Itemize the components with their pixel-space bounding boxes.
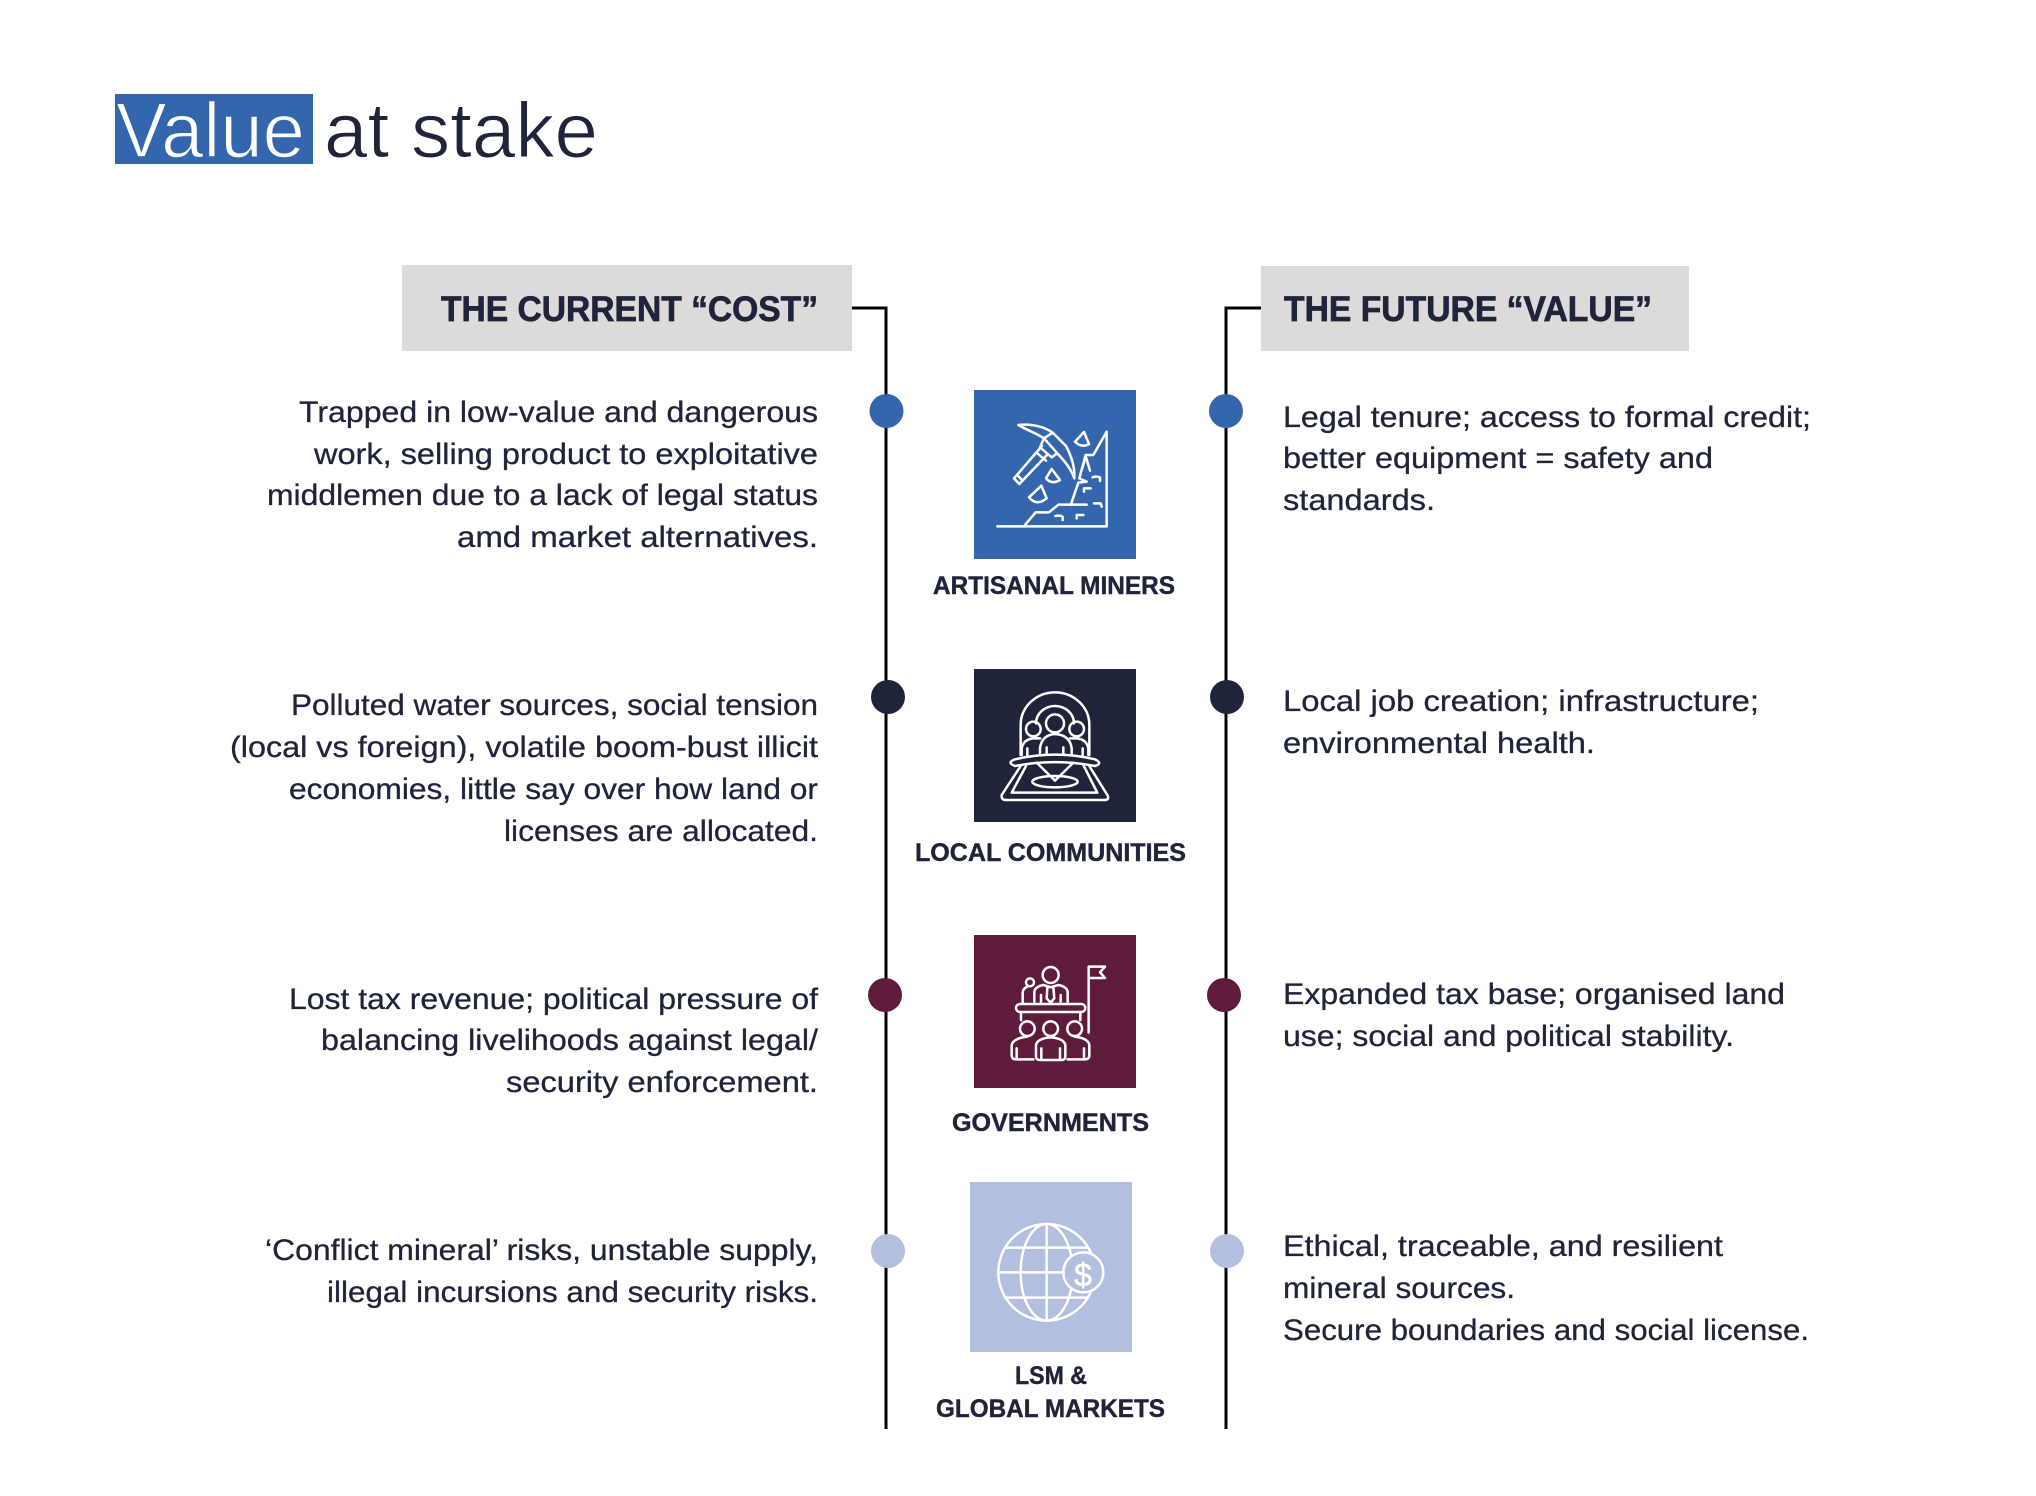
cost text: LSM and global markets: ‘Conflict mineral’ risks, unstable supply, xyxy=(265,1234,818,1267)
value text: local communities: Local job creation; infrastructure; xyxy=(1283,685,1759,718)
cost text: local communities: Polluted water sources, social tension xyxy=(291,689,818,722)
cost text: artisanal miners: amd market alternatives. xyxy=(457,521,818,554)
label: artisanal miners: ARTISANAL MINERS xyxy=(933,572,1175,600)
value text: LSM and global markets xyxy=(1283,1230,1809,1347)
cost text: LSM and global markets xyxy=(265,1234,818,1309)
label: LSM and global markets xyxy=(936,1362,1165,1423)
label: LSM and global markets: LSM & xyxy=(1015,1362,1087,1390)
heading: the future value: THE FUTURE “VALUE” xyxy=(1284,290,1652,329)
icon: community around a land table on navy tile xyxy=(974,669,1136,822)
cost text: LSM and global markets: illegal incursions and security risks. xyxy=(327,1276,818,1309)
title: at stake xyxy=(324,86,598,174)
value text: local communities xyxy=(1283,685,1759,760)
left timeline connector xyxy=(852,308,886,1429)
cost text: artisanal miners: work, selling product to exploitative xyxy=(313,438,818,471)
markers: artisanal miners row xyxy=(870,394,1243,428)
icon: pickaxe and rock on blue tile xyxy=(974,390,1136,559)
icon: globe with dollar coin on periwinkle tile: $ xyxy=(1074,1257,1092,1293)
title: Value xyxy=(116,86,305,174)
cost text: artisanal miners: middlemen due to a lack of legal status xyxy=(267,479,818,512)
value text: local communities: environmental health. xyxy=(1283,727,1595,760)
icon: globe with dollar coin on periwinkle tile xyxy=(970,1182,1132,1352)
value text: artisanal miners: better equipment = safety and xyxy=(1283,442,1713,475)
cost text: governments xyxy=(289,983,819,1099)
value text: LSM and global markets: Secure boundaries and social license. xyxy=(1283,1314,1809,1347)
value text: artisanal miners: Legal tenure; access to formal credit; xyxy=(1283,401,1811,434)
markers: governments row xyxy=(868,978,1241,1012)
markers: LSM and global markets row xyxy=(871,1234,1244,1268)
cost text: local communities: licenses are allocated. xyxy=(504,815,818,848)
cost text: local communities: economies, little say over how land or xyxy=(289,773,818,806)
icon: speaker at podium with audience on maroon tile xyxy=(974,935,1136,1088)
cost text: governments: balancing livelihoods against legal/ xyxy=(321,1024,819,1057)
value text: governments xyxy=(1283,978,1785,1053)
cost text: artisanal miners: Trapped in low-value and dangerous xyxy=(299,396,818,429)
value text: governments: Expanded tax base; organised land xyxy=(1283,978,1785,1011)
cost text: artisanal miners xyxy=(267,396,818,554)
value text: artisanal miners: standards. xyxy=(1283,484,1435,517)
value text: LSM and global markets: Ethical, traceable, and resilient xyxy=(1283,1230,1724,1263)
cost text: governments: Lost tax revenue; political pressure of xyxy=(289,983,819,1016)
cost text: local communities xyxy=(230,689,819,848)
title xyxy=(115,86,598,174)
value text: LSM and global markets: mineral sources. xyxy=(1283,1272,1515,1305)
label: governments: GOVERNMENTS xyxy=(952,1109,1149,1137)
heading: the current cost xyxy=(402,265,852,351)
right timeline connector xyxy=(1226,308,1261,1429)
heading: the future value xyxy=(1261,266,1689,351)
heading: the current cost: THE CURRENT “COST” xyxy=(441,290,818,329)
label: local communities: LOCAL COMMUNITIES xyxy=(915,839,1186,867)
cost text: governments: security enforcement. xyxy=(506,1066,818,1099)
label: LSM and global markets: GLOBAL MARKETS xyxy=(936,1395,1165,1423)
value text: artisanal miners xyxy=(1283,401,1811,517)
markers: local communities row xyxy=(871,680,1244,714)
value text: governments: use; social and political stability. xyxy=(1283,1020,1734,1053)
cost text: local communities: (local vs foreign), volatile boom-bust illicit xyxy=(230,731,819,764)
